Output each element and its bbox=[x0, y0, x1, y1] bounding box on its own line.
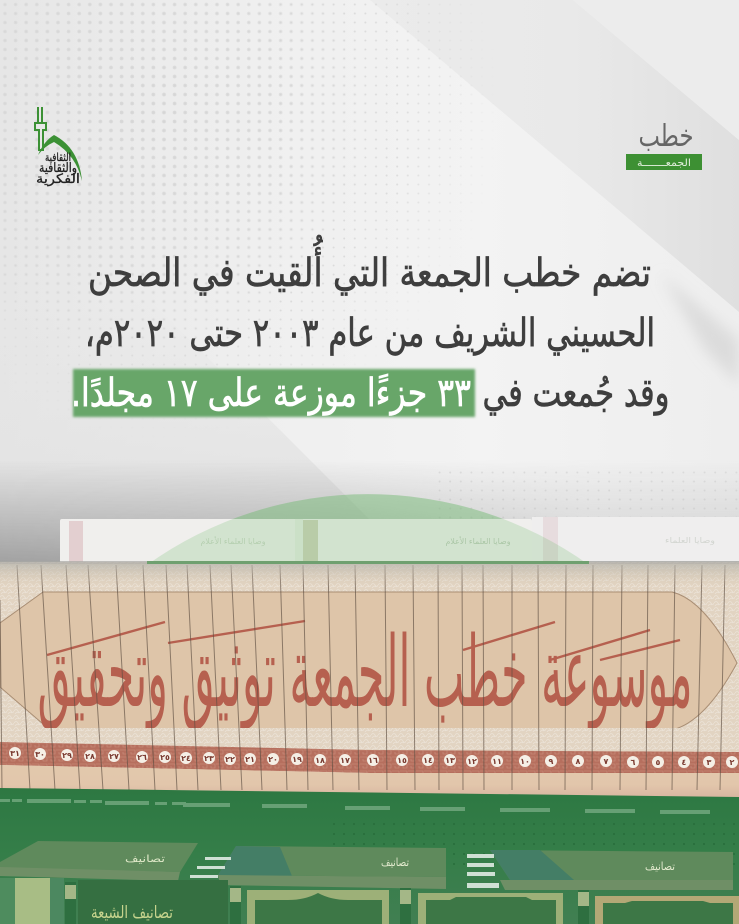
lying book 2: تصانيف bbox=[381, 856, 409, 869]
volume numbers: ١٧ bbox=[340, 756, 350, 765]
volume numbers: ٣٠ bbox=[35, 750, 45, 759]
volume numbers: ١٤ bbox=[423, 756, 433, 765]
volume numbers: ٣١ bbox=[10, 749, 20, 758]
logo calligraphy: الفكرية bbox=[36, 172, 80, 187]
volume numbers: ٢٤ bbox=[181, 754, 191, 763]
green semicircle bbox=[147, 494, 589, 565]
logo calligraphy: والثقافية bbox=[39, 161, 77, 176]
shading along book tops bbox=[0, 564, 739, 586]
volume numbers: ٢١ bbox=[245, 755, 255, 764]
text line 2: الحسيني الشريف من عام ٢٠٠٣ حتى ٢٠٢٠م، bbox=[85, 311, 655, 356]
wrapped volumes lying on top: وصايا العلماء الأعلام bbox=[200, 536, 266, 546]
wrapped volumes lying on top: وصايا العلماء الأعلام bbox=[446, 536, 511, 546]
volume numbers: ٢٠ bbox=[268, 755, 278, 764]
volume numbers bbox=[9, 747, 738, 768]
volume numbers: ١٢ bbox=[467, 757, 477, 766]
highlighted text: ٣٣ جزءًا موزعة على ١٧ مجلدًا. bbox=[71, 371, 471, 416]
logo calligraphy: الثقافية bbox=[45, 151, 71, 164]
volume numbers: ١٣ bbox=[445, 756, 455, 765]
volume numbers: ٦ bbox=[631, 758, 636, 767]
band of arabesque bbox=[0, 728, 739, 744]
logo bbox=[35, 107, 82, 187]
heading label: Friday sermons bbox=[626, 119, 702, 170]
volume numbers: ٢ bbox=[730, 758, 735, 767]
volume numbers: ١٦ bbox=[368, 756, 378, 765]
volume numbers: ٨ bbox=[576, 757, 581, 766]
lying book 1: تصانيف bbox=[125, 854, 165, 865]
background bbox=[0, 0, 739, 570]
volume numbers: ٢٥ bbox=[160, 753, 170, 762]
icon: minaret bbox=[35, 107, 46, 150]
volume numbers: ١٩ bbox=[292, 755, 302, 764]
page stripes bbox=[190, 854, 499, 888]
wrapped volumes lying on top: وصايا العلماء bbox=[665, 536, 715, 545]
shelf of encyclopedia volumes bbox=[0, 561, 739, 798]
volume numbers: ٢٨ bbox=[85, 752, 95, 761]
volume numbers: ٩ bbox=[549, 757, 554, 766]
lying book 3: تصانيف bbox=[645, 860, 675, 873]
volume numbers: ٧ bbox=[604, 757, 609, 766]
volume numbers: ٥ bbox=[656, 758, 661, 767]
volume numbers: ٢٦ bbox=[137, 753, 147, 762]
standing books row: تصانيف الشيعة bbox=[91, 903, 173, 923]
wrapped volumes lying on top bbox=[60, 517, 739, 562]
word: sermons: خطب bbox=[638, 119, 694, 154]
shelf edge studs bbox=[0, 799, 710, 814]
main text block bbox=[71, 235, 669, 417]
volume numbers: ٣ bbox=[707, 758, 712, 767]
lower book edges bbox=[0, 765, 739, 798]
logo calligraphy bbox=[36, 151, 80, 187]
volume numbers: ١٠ bbox=[520, 757, 530, 766]
volume numbers: ١١ bbox=[492, 757, 502, 766]
volume numbers: ١٨ bbox=[315, 756, 325, 765]
title panel bbox=[0, 592, 737, 730]
green highlight bbox=[73, 369, 475, 417]
standing books row bbox=[0, 878, 739, 924]
volume numbers: ٢٢ bbox=[225, 755, 235, 764]
icon: dome bbox=[38, 135, 82, 181]
volume numbers: ٢٩ bbox=[62, 751, 72, 760]
lying book 2 bbox=[218, 846, 446, 889]
lower shelf bbox=[0, 788, 739, 924]
volume numbers: ٤ bbox=[682, 758, 687, 767]
text line 3 lead: وقد جُمعت في bbox=[482, 371, 670, 416]
lying book 1 bbox=[0, 841, 198, 881]
volume numbers: ١٥ bbox=[397, 756, 407, 765]
numbered key band bbox=[0, 742, 739, 773]
spine gaps bbox=[0, 565, 725, 790]
lying book 3 bbox=[490, 850, 733, 890]
volume numbers: ٢٧ bbox=[109, 752, 119, 761]
green tag: الجمعـــــــة bbox=[637, 158, 691, 169]
volume numbers: ٢٣ bbox=[204, 754, 214, 763]
